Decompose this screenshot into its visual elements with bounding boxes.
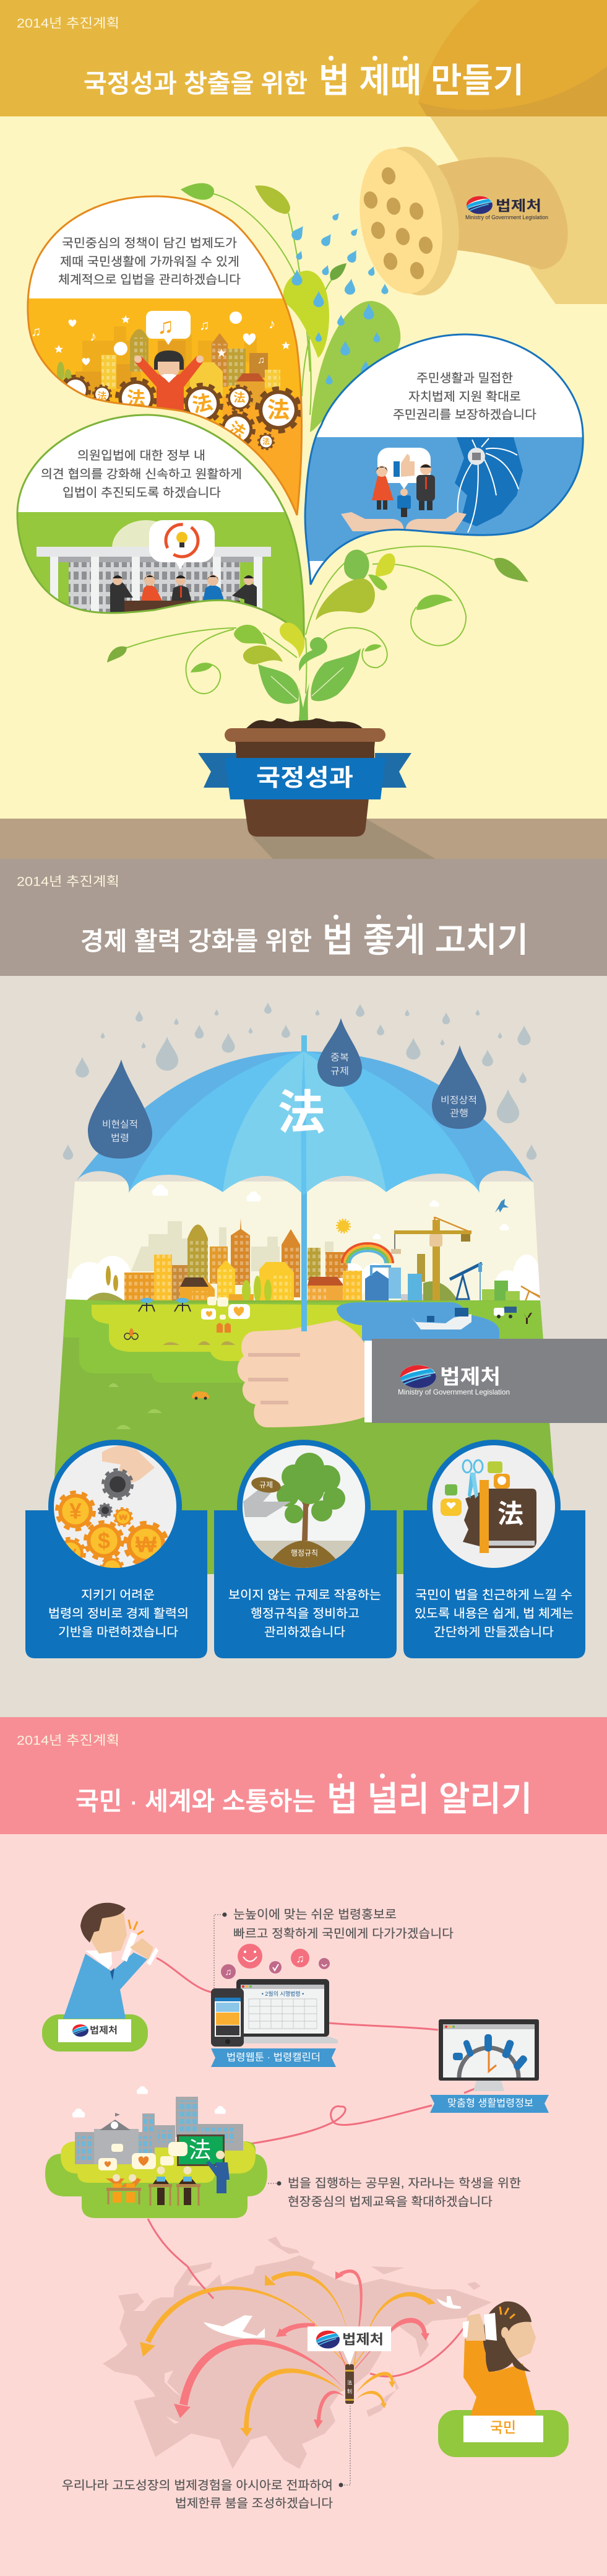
drop: duplicate regulation: 규제 bbox=[330, 1066, 349, 1076]
text: local bubble: 주민생활과 밀접한 bbox=[416, 372, 513, 385]
ribbon: webtoon and calendar: 법령웹툰 · 법령캘린더 bbox=[226, 2052, 321, 2063]
ribbon: national achievements bbox=[198, 753, 411, 799]
thin cords bbox=[148, 1958, 476, 2377]
drop: duplicate regulation bbox=[317, 1018, 362, 1087]
illustration: joyful citizen with gears: ♫ bbox=[257, 355, 265, 365]
section 1 title: 법 제때 만들기 bbox=[319, 61, 524, 100]
person: citizen with cup bbox=[438, 2302, 569, 2457]
logo label on map bbox=[308, 2326, 391, 2365]
plane bbox=[495, 1199, 509, 1212]
law book spine: 法 bbox=[347, 2379, 352, 2385]
text: legal exports: 법제한류 붐을 조성하겠습니다 bbox=[175, 2497, 333, 2510]
icon: tree pruned: 규제 bbox=[259, 1481, 273, 1489]
text: people bubble: 국민중심의 정책이 담긴 법제도가 bbox=[62, 237, 237, 250]
text: education: 법을 집행하는 공무원, 자라나는 학생을 위한 bbox=[288, 2177, 521, 2190]
icon: money gears: ₩ bbox=[119, 1512, 127, 1522]
sun bbox=[338, 1221, 349, 1232]
illustration: joyful citizen with gears: 法 bbox=[97, 390, 107, 401]
icon: book and scissors bbox=[441, 1460, 536, 1553]
section 2 title: 법 좋게 고치기 bbox=[322, 921, 528, 959]
drop: duplicate regulation: 중복 bbox=[330, 1053, 349, 1063]
section 3 header band bbox=[0, 1717, 607, 1834]
panel: leaf bubble – blue local bbox=[300, 334, 591, 585]
section 1 title: 국정성과 창출을 위한 bbox=[84, 69, 308, 98]
text: people bubble bbox=[58, 237, 241, 287]
illustration: national assembly meeting bbox=[12, 512, 309, 642]
planes bbox=[204, 2296, 461, 2338]
illustration: joyful citizen with gears: 法 bbox=[225, 419, 249, 442]
text: card 3: 간단하게 만들겠습니다 bbox=[434, 1625, 554, 1639]
clouds bbox=[66, 1185, 541, 1307]
text: card 1: 법령의 정비로 경제 활력의 bbox=[48, 1607, 189, 1621]
logo on watering can bbox=[465, 196, 548, 220]
text: people bubble: 체계적으로 입법을 관리하겠습니다 bbox=[58, 273, 241, 287]
illustration: joyful citizen with gears: ♪ bbox=[269, 316, 275, 332]
illustration: joyful citizen with gears: ♫ bbox=[199, 317, 209, 333]
school on green hill bbox=[45, 2086, 267, 2218]
phone with webtoon bbox=[211, 1988, 244, 2047]
illustration: joyful citizen with gears: ♫ bbox=[157, 313, 174, 338]
section 2 header band bbox=[0, 859, 607, 976]
law book spine: 制 bbox=[347, 2388, 352, 2394]
section 2 title: 경제 활력 강화를 위한 bbox=[80, 927, 312, 955]
crane bbox=[391, 1217, 471, 1300]
section 3 year label: 2014년 추진계획 bbox=[17, 1734, 119, 1747]
umbrella law character: 法 bbox=[278, 1087, 325, 1139]
text: assembly bubble: 의원입법에 대한 정부 내 bbox=[77, 449, 205, 463]
illustration: joyful citizen with gears: 法 bbox=[191, 391, 214, 417]
cityscape bbox=[87, 1218, 362, 1308]
bicycle bbox=[124, 1333, 138, 1339]
icon: money gears: ¥ bbox=[69, 1499, 82, 1523]
drop: unrealistic laws: 비현실적 bbox=[102, 1120, 138, 1129]
hand holding umbrella bbox=[238, 1300, 365, 1427]
icon: watering can bbox=[350, 116, 607, 304]
section 2 title bbox=[80, 915, 528, 959]
panel: leaf bubble – orange people bbox=[25, 196, 303, 521]
section 3 background bbox=[0, 1717, 607, 2576]
law book spine bbox=[345, 2364, 354, 2404]
text: card 3: 있도록 내용은 쉽게, 법 체계는 bbox=[415, 1607, 574, 1621]
text: legal exports: 우리나라 고도성장의 법제경험을 아시아로 전파하여 bbox=[62, 2479, 333, 2492]
panel: leaf bubble – green assembly bbox=[12, 415, 309, 642]
ribbon: custom life law info bbox=[430, 2095, 549, 2113]
upper plant stems and leaves bbox=[181, 183, 400, 432]
laptop with law calendar: • 2월의 시행법령 • bbox=[262, 1990, 304, 1997]
illustration: joyful citizen with gears: 法 bbox=[262, 437, 270, 446]
map of Asia bbox=[103, 2237, 492, 2469]
sleeve with logo bbox=[364, 1339, 607, 1423]
card: tree bbox=[214, 1440, 397, 1658]
text: local bubble: 자치법제 지원 확대로 bbox=[408, 390, 521, 404]
laptop with law calendar bbox=[236, 1979, 338, 2043]
section 3 title bbox=[75, 1773, 532, 1818]
section 2 year label: 2014년 추진계획 bbox=[17, 874, 119, 889]
drop: unrealistic laws bbox=[88, 1060, 152, 1159]
text: card 3 bbox=[415, 1588, 574, 1639]
illustration: family and Korea map bbox=[300, 437, 591, 561]
factory and oil pump bbox=[365, 1262, 540, 1300]
logo on watering can: Ministry of Government Legislation bbox=[465, 214, 548, 220]
icon: tree pruned: 행정규칙 bbox=[291, 1548, 318, 1557]
cafe tables bbox=[139, 1298, 191, 1312]
text: assembly bubble: 입법이 추진되도록 하겠습니다 bbox=[62, 486, 221, 500]
drop: abnormal practice bbox=[432, 1045, 486, 1129]
school on green hill: 法 bbox=[189, 2138, 211, 2162]
text: promotion: 눈높이에 맞는 쉬운 법령홍보로 bbox=[233, 1908, 397, 1921]
section 1 background bbox=[0, 0, 607, 859]
section 1 header band bbox=[0, 0, 607, 116]
lower plant bbox=[107, 546, 528, 724]
logo on watering can: 법제처 bbox=[496, 198, 541, 214]
text: card 1: 기반을 마련하겠습니다 bbox=[58, 1625, 178, 1639]
text: education bbox=[268, 2177, 521, 2209]
text: card 1: 지키기 어려운 bbox=[81, 1588, 155, 1602]
cargo ship bbox=[411, 1314, 471, 1329]
logo label on map: 법제처 bbox=[342, 2332, 384, 2347]
person: ministry spokesperson bbox=[42, 1903, 158, 2052]
text: people bubble: 제때 국민생활에 가까워질 수 있게 bbox=[60, 255, 239, 269]
text: promotion: 빠르고 정확하게 국민에게 다가가겠습니다 bbox=[233, 1927, 454, 1941]
pink feedback icons: ♫ bbox=[225, 1967, 232, 1978]
text: card 2: 보이지 않는 규제로 작용하는 bbox=[228, 1588, 381, 1602]
section 3: communication bbox=[0, 1717, 607, 2576]
text: promotion bbox=[214, 1908, 454, 1988]
ribbon: custom life law info: 맞춤형 생활법령정보 bbox=[447, 2098, 533, 2109]
pot shadow bbox=[252, 819, 436, 859]
illustration: joyful citizen with gears: ♫ bbox=[31, 323, 41, 339]
drop: abnormal practice: 비정상적 bbox=[441, 1095, 477, 1106]
ribbon: national achievements: 국정성과 bbox=[256, 765, 353, 791]
text: card 2 bbox=[228, 1588, 381, 1639]
illustration: joyful citizen with gears: 法 bbox=[233, 391, 246, 405]
ribbon: webtoon and calendar bbox=[211, 2048, 336, 2067]
drop: abnormal practice: 관행 bbox=[450, 1108, 468, 1118]
illustration: joyful citizen with gears: ♪ bbox=[90, 328, 97, 344]
section 1: national achievements bbox=[0, 0, 607, 859]
text: local bubble bbox=[393, 372, 536, 422]
illustration: joyful citizen with gears: 法 bbox=[267, 398, 290, 422]
sleeve with logo: Ministry of Government Legislation bbox=[398, 1388, 510, 1396]
icon: money gears bbox=[55, 1445, 167, 1580]
icon: money gears: ¥ bbox=[68, 1546, 77, 1563]
green pill with plate bbox=[42, 2014, 148, 2052]
section 1 year label: 2014년 추진계획 bbox=[17, 16, 119, 31]
section 2: economy bbox=[0, 859, 607, 1717]
card: law book bbox=[403, 1440, 585, 1658]
icon: money gears: $ bbox=[98, 1528, 110, 1553]
sheltered scene under umbrella bbox=[50, 1177, 563, 1579]
text: legal exports bbox=[62, 2406, 350, 2510]
text: education: 현장중심의 법제교육을 확대하겠습니다 bbox=[288, 2195, 493, 2209]
monitor with life law info bbox=[439, 2019, 539, 2091]
green pill with plate: 법제처 bbox=[90, 2025, 118, 2036]
umbrella pole bbox=[301, 1183, 307, 1331]
sleeve with logo: 법제처 bbox=[440, 1365, 501, 1388]
pink feedback icons bbox=[221, 1944, 330, 1979]
pink feedback icons: ♫ bbox=[296, 1952, 304, 1965]
floor bbox=[0, 819, 607, 859]
text: assembly bubble: 의견 협의를 강화해 신속하고 원활하게 bbox=[41, 468, 242, 481]
text: assembly bubble bbox=[41, 449, 242, 500]
drop: unrealistic laws: 법령 bbox=[111, 1133, 129, 1143]
arrows spreading law across Asia bbox=[140, 2269, 436, 2437]
illustration: joyful citizen with gears bbox=[25, 298, 303, 521]
water drops bbox=[290, 211, 389, 385]
rainbow bbox=[342, 1243, 393, 1263]
text: local bubble: 주민권리를 보장하겠습니다 bbox=[393, 408, 536, 422]
card: gears bbox=[25, 1440, 207, 1658]
icon: money gears: ₩ bbox=[136, 1532, 157, 1557]
section 3 title: 국민 · 세계와 소통하는 bbox=[75, 1787, 316, 1816]
section 2 background bbox=[0, 859, 607, 1717]
green pill with plate bbox=[438, 2334, 569, 2457]
green pill with plate: 국민 bbox=[490, 2420, 516, 2436]
truck bbox=[494, 1307, 517, 1318]
section 3 title: 법 널리 알리기 bbox=[327, 1780, 532, 1818]
chat bubbles and couple bbox=[201, 1297, 250, 1333]
icon: book and scissors: 法 bbox=[497, 1500, 523, 1528]
text: card 3: 국민이 법을 친근하게 느낄 수 bbox=[415, 1588, 572, 1602]
section 1 title bbox=[84, 56, 524, 100]
text: card 2: 행정규칙을 정비하고 bbox=[251, 1607, 359, 1621]
illustration: joyful citizen with gears: 法 bbox=[127, 389, 145, 410]
rain drops bbox=[63, 1003, 536, 1160]
ground terraces bbox=[50, 1297, 563, 1579]
text: card 2: 관리하겠습니다 bbox=[264, 1625, 345, 1639]
umbrella canopy bbox=[75, 1035, 533, 1195]
icon: tree pruned bbox=[243, 1453, 355, 1568]
pot bbox=[225, 718, 385, 837]
text: card 1 bbox=[48, 1588, 189, 1639]
